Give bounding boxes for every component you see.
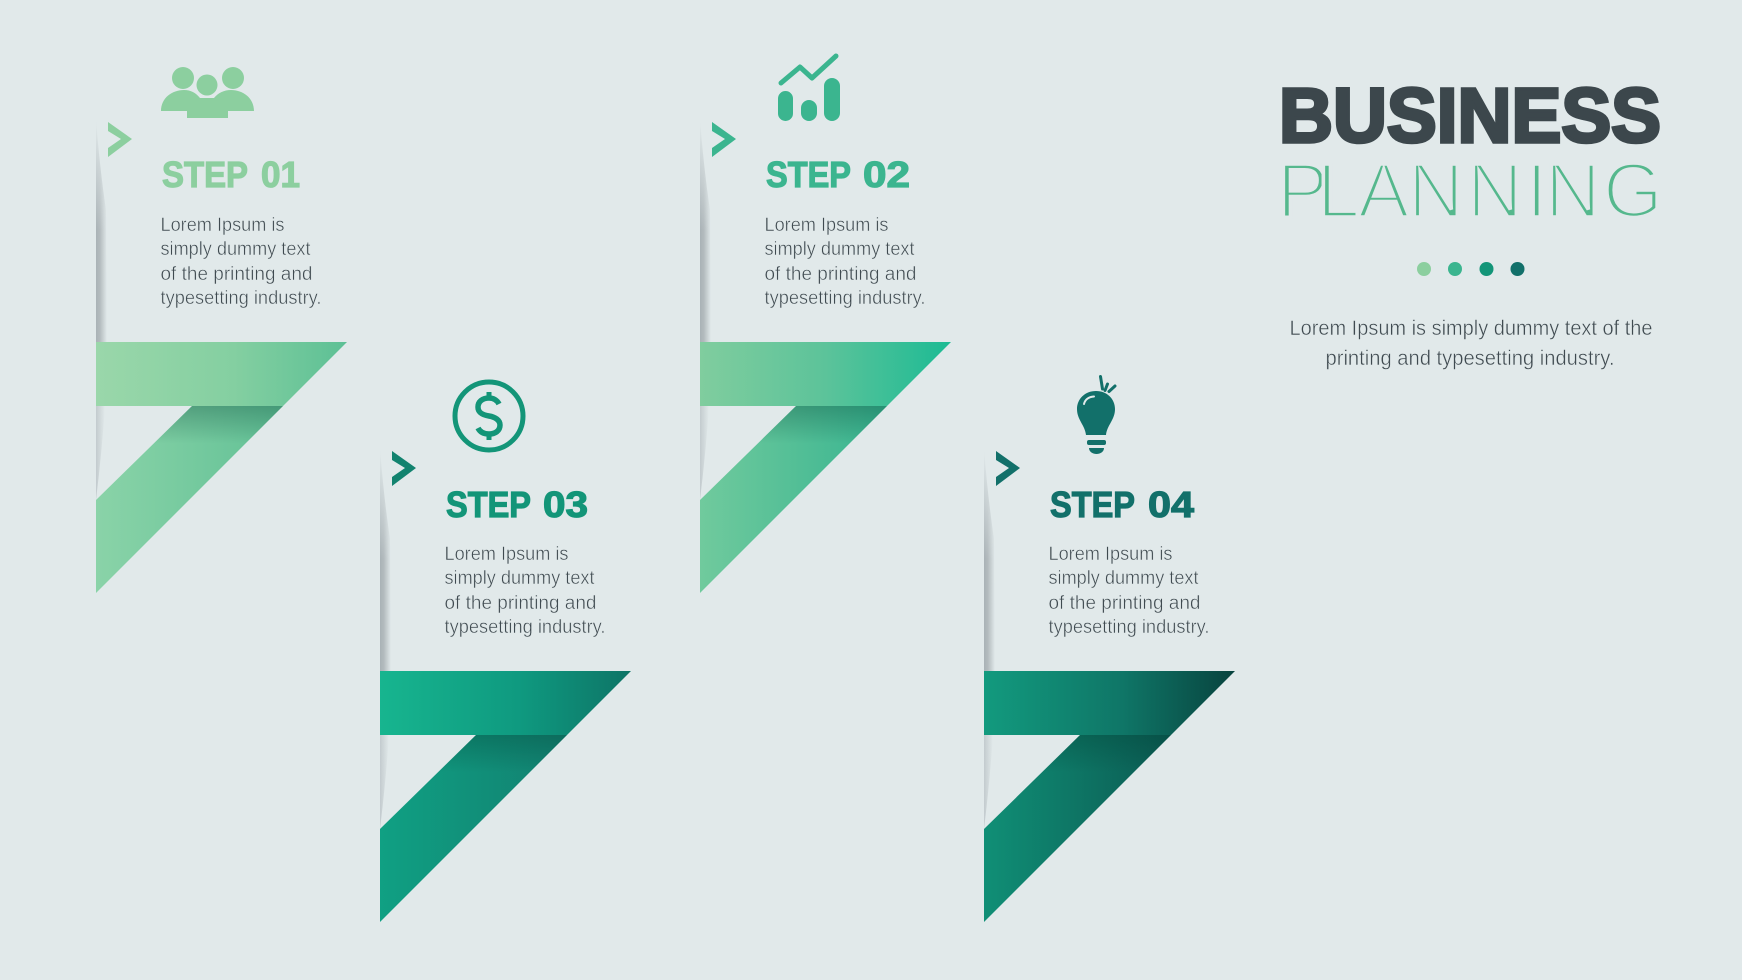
icon: light bulb bbox=[1077, 376, 1115, 454]
text block: Lorem Ipsum is bbox=[764, 215, 888, 236]
text block: Lorem Ipsum is bbox=[1048, 544, 1172, 565]
fold shadow bbox=[984, 449, 996, 829]
icon: dollar coin bbox=[455, 382, 523, 450]
fold shadow bbox=[380, 449, 392, 829]
heading: 03 bbox=[543, 484, 588, 525]
chevron bbox=[392, 451, 416, 486]
chevron bbox=[996, 451, 1020, 486]
panel: step 04 bbox=[984, 376, 1235, 922]
fold shadow bbox=[96, 120, 108, 500]
text block bbox=[444, 544, 606, 638]
description: Lorem Ipsum is simply dummy text of the bbox=[1290, 317, 1652, 340]
progress dots bbox=[1417, 262, 1524, 276]
panel: step 01 bbox=[96, 67, 347, 593]
text block: Lorem Ipsum is bbox=[160, 215, 284, 236]
description: printing and typesetting industry. bbox=[1326, 347, 1614, 370]
heading: STEP bbox=[766, 154, 851, 195]
text block: typesetting industry. bbox=[444, 617, 606, 638]
text block bbox=[1048, 544, 1210, 638]
ribbon bbox=[700, 342, 951, 593]
text block: of the printing and bbox=[160, 264, 312, 285]
text block: typesetting industry. bbox=[1048, 617, 1210, 638]
panel: step 03 bbox=[380, 382, 631, 922]
text block: typesetting industry. bbox=[160, 288, 322, 309]
text block: of the printing and bbox=[764, 264, 916, 285]
heading bbox=[446, 484, 588, 525]
heading: 04 bbox=[1148, 484, 1194, 525]
heading: 01 bbox=[261, 154, 300, 195]
heading: 02 bbox=[863, 154, 910, 195]
text block: of the printing and bbox=[444, 593, 596, 614]
heading bbox=[1050, 484, 1194, 525]
text block: of the printing and bbox=[1048, 593, 1200, 614]
ribbon bbox=[96, 342, 347, 593]
title bbox=[1277, 73, 1663, 234]
heading bbox=[162, 154, 300, 195]
text block: simply dummy text bbox=[1048, 568, 1199, 589]
description bbox=[1290, 317, 1652, 370]
heading bbox=[766, 154, 910, 195]
icon: growth chart bbox=[778, 56, 840, 121]
text block: Lorem Ipsum is bbox=[444, 544, 568, 565]
text block bbox=[764, 215, 926, 309]
title line: planning: PLANNING bbox=[1277, 148, 1663, 234]
heading: STEP bbox=[1050, 484, 1135, 525]
heading: STEP bbox=[446, 484, 531, 525]
ribbon bbox=[380, 671, 631, 922]
title line: business: BUSINESS bbox=[1279, 73, 1661, 159]
text block: simply dummy text bbox=[764, 239, 915, 260]
chevron bbox=[108, 122, 132, 157]
text block: simply dummy text bbox=[160, 239, 311, 260]
text block bbox=[160, 215, 322, 309]
panel: step 02 bbox=[700, 56, 951, 593]
heading: STEP bbox=[162, 154, 248, 195]
icon: people bbox=[161, 67, 254, 118]
ribbon bbox=[984, 671, 1235, 922]
fold shadow bbox=[700, 120, 712, 500]
text block: typesetting industry. bbox=[764, 288, 926, 309]
text block: simply dummy text bbox=[444, 568, 595, 589]
chevron bbox=[712, 122, 736, 157]
